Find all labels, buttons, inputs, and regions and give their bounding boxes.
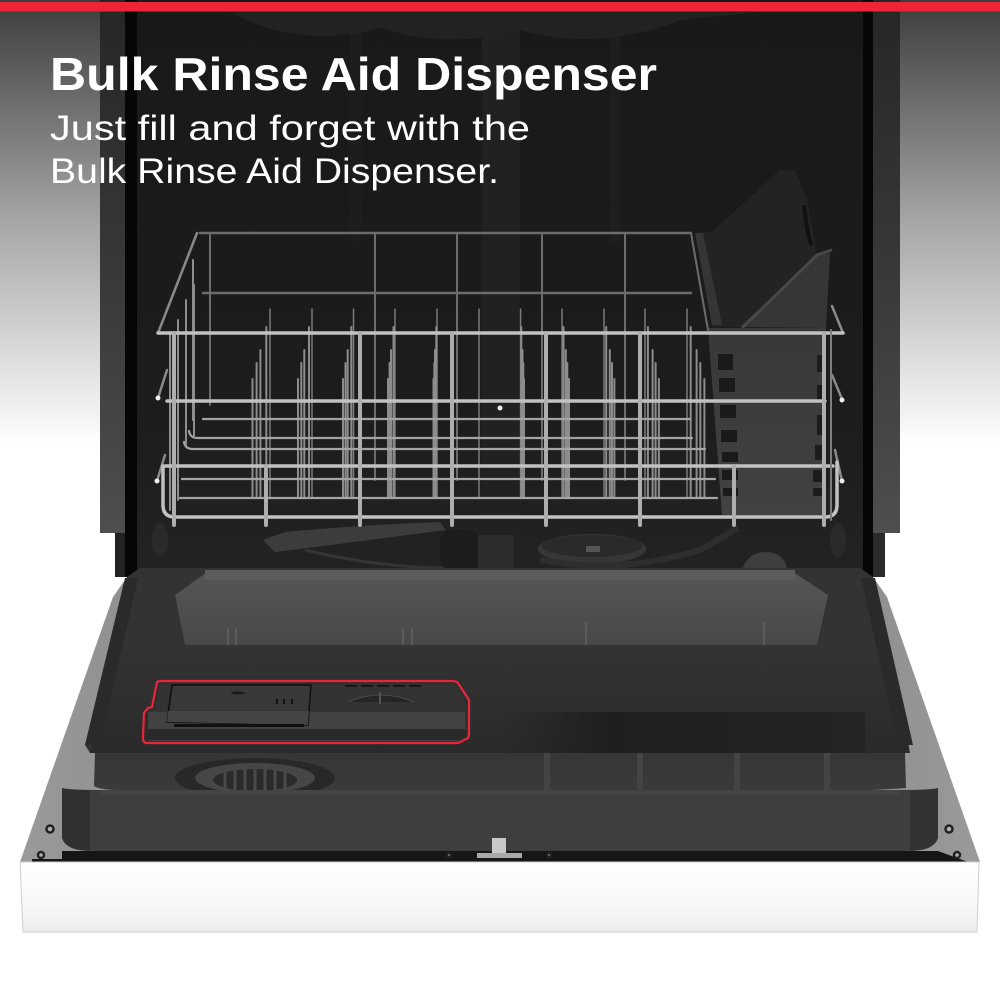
spray arm and sump [152, 522, 846, 570]
door inner liner [85, 568, 910, 753]
background gradient [0, 0, 1000, 445]
door side gutters [85, 578, 913, 745]
door middle panel [90, 645, 910, 753]
white door front [20, 862, 979, 932]
rack stepped tines [252, 327, 704, 497]
dish rack [154, 233, 844, 525]
drain filter [175, 758, 335, 798]
rack back tines [270, 309, 687, 497]
door latch [477, 838, 522, 858]
red top bar [0, 2, 1000, 12]
door upper panel [175, 570, 828, 645]
door front basin [62, 788, 938, 851]
rack side wires [170, 260, 194, 510]
door metal frame [20, 577, 980, 862]
dishwasher tub [100, 0, 900, 577]
subtitle [50, 109, 530, 191]
rack front uprights [174, 333, 824, 525]
rack back wires [158, 233, 708, 480]
rack rail end caps [154, 396, 844, 484]
rack floor wires [180, 419, 717, 498]
black door seam [32, 851, 968, 862]
red highlight outline [143, 681, 469, 743]
title: Bulk Rinse Aid Dispenser [50, 48, 657, 100]
utensil basket [695, 170, 832, 515]
door lower lip [94, 753, 906, 790]
rinse aid dispenser [148, 685, 466, 741]
rack front rails [158, 333, 843, 517]
subtitle: Bulk Rinse Aid Dispenser. [50, 152, 499, 191]
subtitle: Just fill and forget with the [50, 109, 530, 148]
door corner screws [38, 826, 960, 858]
